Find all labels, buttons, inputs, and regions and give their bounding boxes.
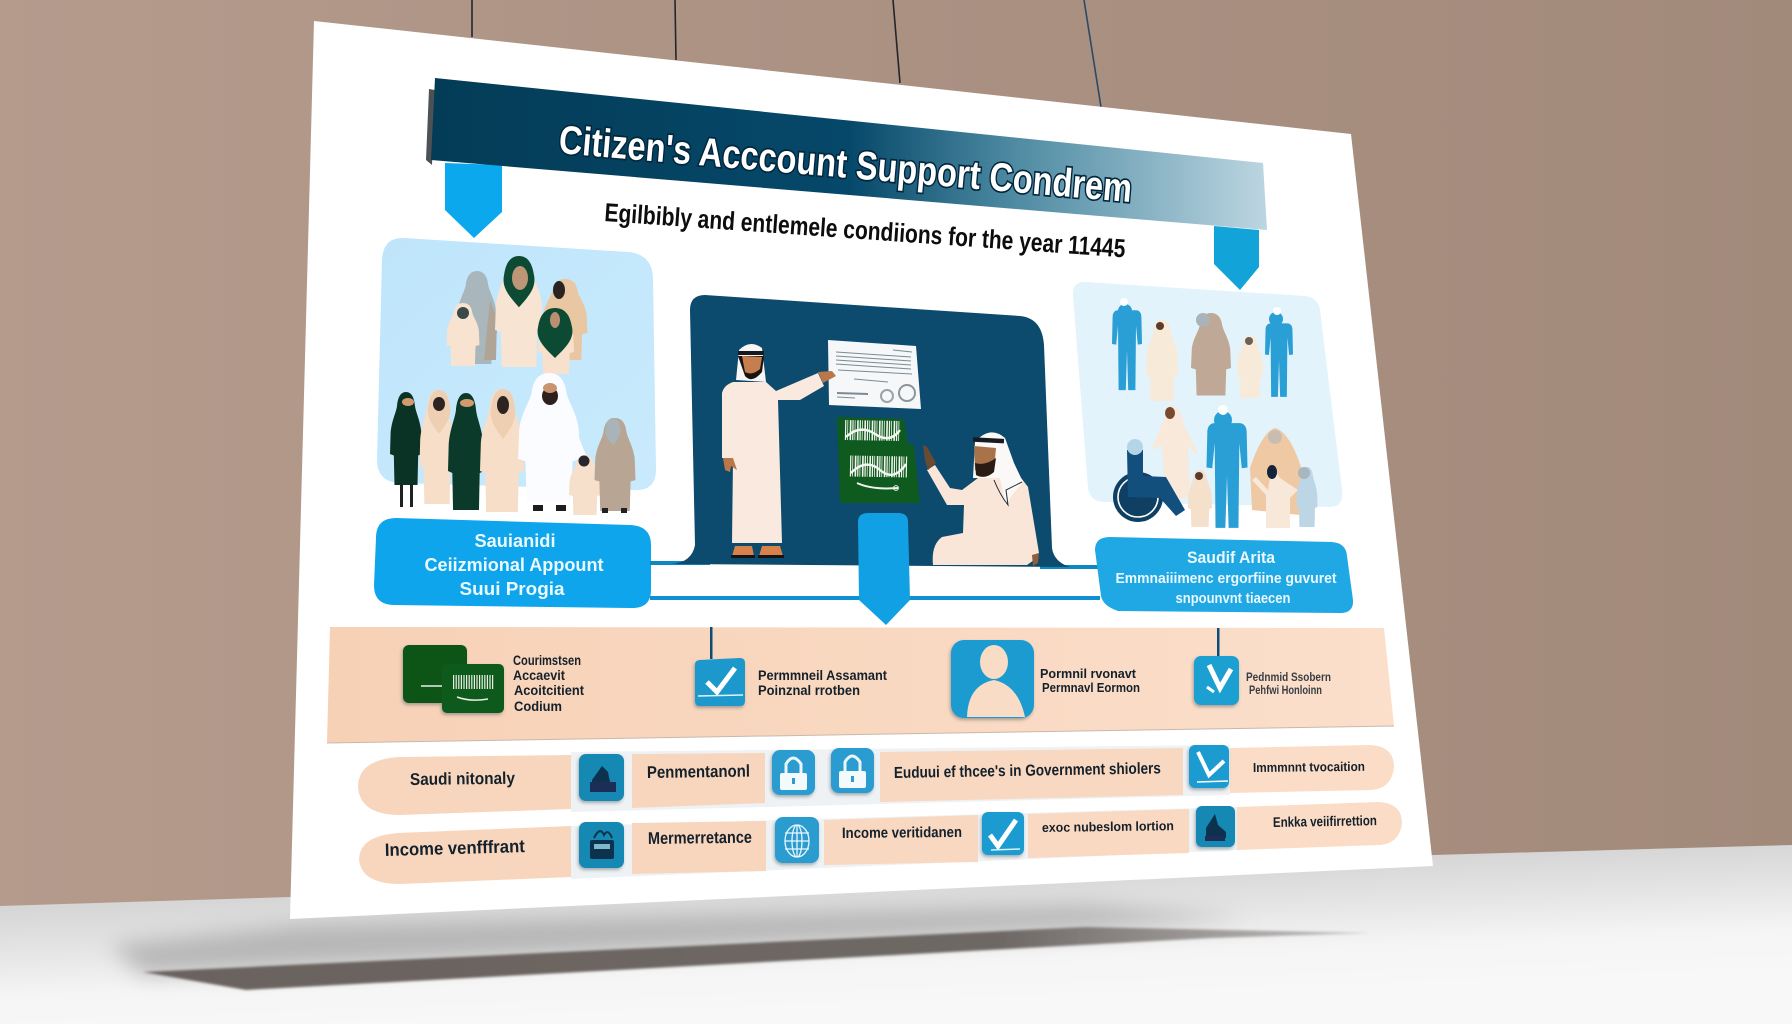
figure: cream child xyxy=(1237,335,1263,398)
left ribbon arrow xyxy=(445,163,502,238)
figure: cream woman 1 xyxy=(420,390,454,504)
panel: centre scene xyxy=(672,295,1070,567)
figure: dark green woman 2 xyxy=(448,393,484,510)
row two label: income: Income venfffrant xyxy=(385,836,525,860)
panel: right family xyxy=(1073,282,1342,528)
icon: check 4 xyxy=(982,812,1024,855)
figure: white man xyxy=(518,373,592,511)
item text 1: Codium xyxy=(514,699,562,714)
figure: tan big xyxy=(1250,428,1302,515)
figure: blue man 1 xyxy=(1112,298,1142,390)
row one label: Permanent: Penmentanonl xyxy=(647,762,750,782)
row two label: income verification: Income veritidanen xyxy=(842,824,962,842)
icon: check card 2 xyxy=(1194,656,1239,705)
item text 4: Pehfwi Honloinn xyxy=(1249,685,1322,697)
figure: tan woman xyxy=(542,279,588,360)
item text 3: Permnavl Eormon xyxy=(1042,680,1140,695)
figure: blue man 2 xyxy=(1265,307,1293,397)
left label text: Sauianidi xyxy=(474,531,556,551)
row one label: verification: Immmnnt tvocaition xyxy=(1253,759,1365,775)
figure: tan woman 2 xyxy=(594,418,636,513)
item text 1: Accaevit xyxy=(513,668,565,683)
figure: cream tall xyxy=(1152,405,1198,498)
icon: machine xyxy=(579,754,624,801)
icon: globe xyxy=(775,817,819,863)
row one label: Saudi nationality: Saudi nitonaly xyxy=(410,769,516,789)
figure: small green hood xyxy=(538,308,574,374)
figure: cream adult xyxy=(1146,320,1178,401)
right label text: Saudif Arita xyxy=(1187,548,1275,567)
floor xyxy=(0,845,1792,1024)
subtitle: Egilbibly and entlemele condiions for the year 11445 xyxy=(604,197,1126,263)
figure: cream child 2 xyxy=(1252,465,1298,528)
row two label: merit: Mermerretance xyxy=(648,828,752,848)
icon: stack xyxy=(1196,806,1235,847)
icon: lock 1 xyxy=(772,750,815,795)
panel: condition row two xyxy=(359,802,1402,884)
icon: register xyxy=(579,822,624,868)
figure: brown adult xyxy=(1191,313,1231,396)
figure: light blue child xyxy=(1296,467,1318,527)
right label text: snpounvnt tiaecen xyxy=(1176,590,1290,607)
figure: small cream child xyxy=(1188,470,1212,527)
icon: wheelchair user xyxy=(1113,439,1185,522)
row two label: exoc: exoc nubeslom lortion xyxy=(1042,818,1174,835)
left label text: Suui Progia xyxy=(460,579,566,599)
figure: grey woman xyxy=(457,271,497,364)
infographic board xyxy=(290,21,1433,919)
item text 1: Courimstsen xyxy=(513,653,581,668)
figure: seated man xyxy=(923,432,1039,566)
item text 1: Acoitcitient xyxy=(514,683,584,698)
right label text: Emmnaiiimenc ergorfiine guvuret xyxy=(1116,570,1337,587)
item text 2: Permmneil Assamant xyxy=(758,668,887,683)
panel: left family xyxy=(377,238,656,515)
item text 3: Pormnil rvonavt xyxy=(1040,666,1137,681)
figure: small child xyxy=(569,455,601,515)
item text 4: Pednmid Ssobern xyxy=(1246,672,1331,684)
figure: child cream xyxy=(446,303,480,366)
flag xyxy=(837,417,920,503)
icon: check card 1 xyxy=(695,658,745,706)
figure: standing man xyxy=(722,344,836,558)
floor shadow xyxy=(110,905,1371,990)
panel: condition row one xyxy=(358,745,1394,815)
figure: woman green hood xyxy=(495,256,543,367)
figure: dark green woman 1 xyxy=(390,392,422,507)
icon: lock 2 xyxy=(831,748,874,793)
centre ribbon arrow xyxy=(858,513,910,625)
connector lines xyxy=(650,561,1100,600)
panel: conditions band xyxy=(327,627,1394,743)
row one label: government: Εuduui ef thcee's in Government shiolers xyxy=(894,760,1161,782)
figure: cream woman 2 xyxy=(480,389,524,512)
right label xyxy=(1095,537,1353,613)
left label xyxy=(374,518,651,608)
figure: blue tall man xyxy=(1206,405,1248,528)
icon: flag cards xyxy=(403,645,504,713)
hanging wires xyxy=(472,0,1101,107)
icon: person card xyxy=(951,640,1034,718)
icon: check 3 xyxy=(1189,745,1229,788)
right ribbon arrow xyxy=(1214,226,1259,290)
title banner xyxy=(426,78,1267,230)
row two label: verification: Enkka veiifirrettion xyxy=(1273,812,1377,830)
title text: Citizen's Acccount Support Condrem xyxy=(557,118,1134,211)
left label text: Ceiizmional Appount xyxy=(424,555,604,575)
item text 2: Poinznal rrotben xyxy=(758,683,860,698)
document xyxy=(828,340,921,409)
